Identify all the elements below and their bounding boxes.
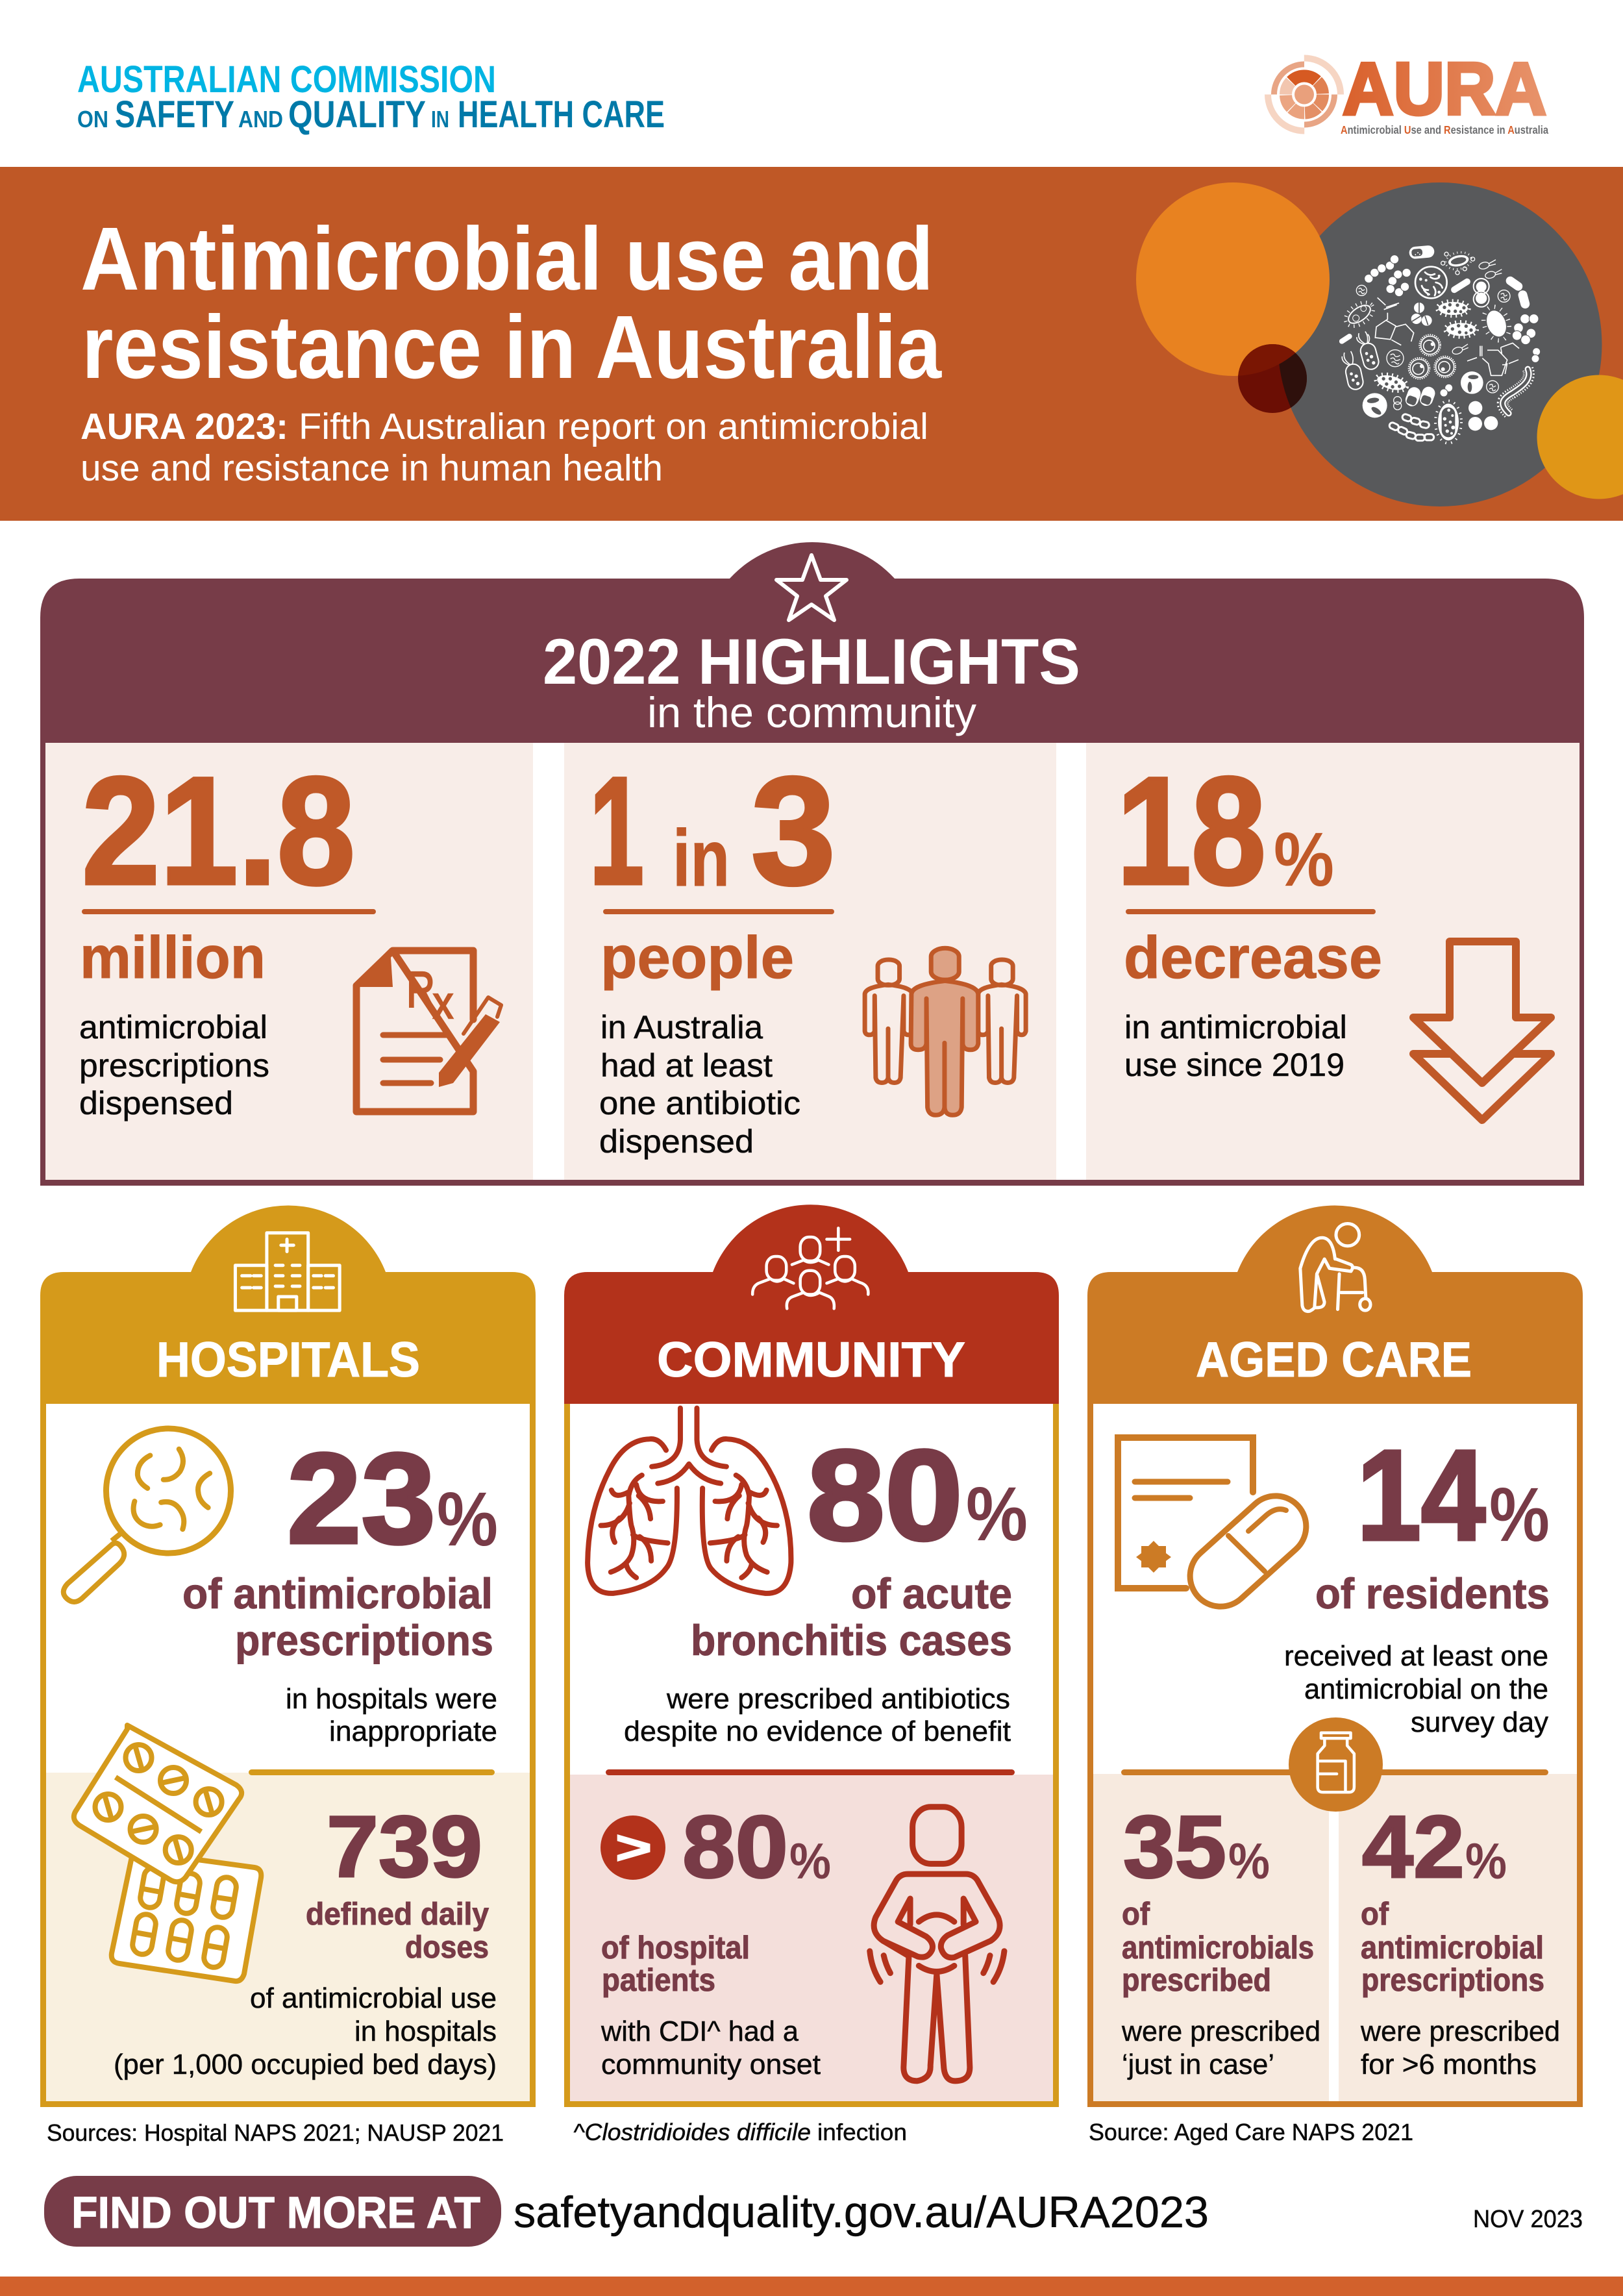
stat: 42 percent: % [1465,1832,1507,1890]
logo: AURA [1268,48,1548,136]
stat: 739 defined daily doses: defined daily [306,1897,489,1932]
icon: hospital building [235,1233,340,1310]
stat: 42 percent [1360,1797,1560,2080]
card: 21.8 million: antimicrobial [79,1009,267,1045]
stat: greater than 80 percent: community onset [601,2049,821,2080]
stat: 14 percent: antimicrobial on the [1304,1673,1548,1705]
stat: greater than 80 percent [601,1797,831,2080]
footnote: CDI [573,2119,907,2145]
logo: Australian Commission on Safety and Quality in Health Care: HEALTH CARE [458,94,665,136]
icon: group of people with plus [752,1228,868,1308]
card: 18% decrease [1086,743,1580,1180]
stat: 42 percent: were prescribed [1360,2015,1560,2047]
stat: 14 percent: of residents [1315,1569,1550,1617]
heading: hospitals: HOSPITALS [156,1332,420,1388]
stat: 42 percent: for >6 months [1361,2049,1537,2080]
footnote: CDI: infection [817,2119,907,2145]
subtitle: use and resistance in human health [81,447,663,489]
stat: 35 percent: % [1228,1832,1270,1890]
stat: 35 percent: of [1122,1897,1150,1932]
stat: greater than 80 percent: of hospital [601,1930,750,1965]
stat: 35 percent: antimicrobials [1122,1930,1314,1965]
stat: 80 percent: bronchitis cases [691,1616,1012,1664]
subtitle: AURA 2023: [81,406,288,447]
stat: 14 percent: % [1489,1472,1550,1558]
card: 1 in 3 people: in [673,814,730,903]
card: 1 in 3 people: people [601,925,794,991]
stat: greater than 80 percent: patients [602,1963,715,1998]
stat: 739 defined daily doses: of antimicrobial use [250,1982,497,2014]
button: find out more: FIND OUT MORE AT [71,2188,480,2238]
stat: 739 defined daily doses: (per 1,000 occupied bed days) [114,2049,497,2080]
subtitle [81,406,928,489]
logo: Australian Commission on Safety and Quality in Health Care: ON [77,106,108,132]
logo: Australian Commission on Safety and Quality in Health Care: SAFETY [115,94,234,136]
card: 18% decrease: in antimicrobial [1124,1009,1347,1045]
stat: greater than 80 percent: > [615,1822,652,1874]
title: resistance in Australia [82,297,942,397]
footer band [0,2277,1623,2296]
logo: Australian Commission on Safety and Quality in Health Care: AUSTRALIAN COMMISSION [77,58,496,101]
title [81,209,942,397]
stat: 35 percent: prescribed [1122,1963,1271,1998]
card: 21.8 million: prescriptions [79,1047,269,1084]
subheading: in the community: in the community [647,688,976,736]
stat: 739 defined daily doses: in hospitals [354,2015,497,2047]
stat: 23 percent: % [437,1477,498,1562]
heading: 2022 highlights: 2022 HIGHLIGHTS [543,625,1080,697]
panel: community [564,1204,1059,2107]
card: 18% decrease: % [1274,817,1334,903]
heading: aged care: AGED CARE [1196,1332,1472,1388]
stat: 739 defined daily doses [114,1799,497,2080]
card: 1 in 3 people: 3 [751,745,836,917]
stat: 42 percent: 42 [1362,1797,1465,1896]
stat: 23 percent: of antimicrobial [182,1569,493,1617]
stat: 23 percent [182,1427,498,1747]
stat: greater than 80 percent: 80 [682,1797,788,1896]
stat: 14 percent [1284,1423,1550,1738]
stat: 42 percent: prescriptions [1361,1963,1544,1998]
subtitle: Fifth Australian report on antimicrobial [299,406,928,447]
stat: 23 percent: prescriptions [235,1616,493,1664]
stat: 739 defined daily doses: doses [405,1930,489,1965]
card: 18% decrease: 18 [1117,745,1266,917]
card: 18% decrease: decrease [1124,925,1382,991]
stat: 35 percent: were prescribed [1121,2015,1320,2047]
publication date: NOV 2023 [1473,2206,1583,2233]
stat: 35 percent: 35 [1123,1797,1226,1896]
panel: title banner [0,167,1623,521]
stat: 14 percent: survey day [1411,1706,1548,1738]
source note: aged care: Source: Aged Care NAPS 2021 [1089,2119,1413,2145]
icon: prescription and pen [354,948,501,1112]
card: 1 in 3 people: in Australia [601,1009,763,1045]
stat: 35 percent [1121,1797,1320,2080]
decorative circles [1136,182,1623,506]
source note: hospitals: Sources: Hospital NAPS 2021; NAUSP 2021 [47,2119,504,2146]
icon: person with abdominal pain [870,1807,1004,2081]
icon: AURA emblem [1268,58,1341,131]
stat: 739 defined daily doses: 739 [327,1799,482,1895]
stat: greater than 80 percent: % [789,1832,831,1890]
stat: 23 percent: 23 [287,1427,436,1570]
stat: 23 percent: inappropriate [329,1716,497,1747]
card: 1 in 3 people: 1 [589,745,644,917]
icon: three people [865,948,1026,1115]
panel: aged care [1087,1205,1583,2107]
card: 18% decrease: use since 2019 [1124,1047,1344,1083]
icon: lungs [588,1408,791,1593]
icon: microbes and medicines cluster [1338,245,1541,443]
stat: 80 percent: of acute [851,1569,1012,1617]
logo: AURA: Antimicrobial Use and Resistance in Australia [1341,123,1548,136]
card: 21.8 million: dispensed [79,1085,233,1121]
stat: 80 percent: despite no evidence of benefit [624,1716,1011,1747]
link text: safetyandquality.gov.au/AURA2023 [514,2188,1209,2237]
stat: 80 percent [624,1423,1028,1747]
stat: 80 percent: % [966,1471,1028,1557]
stat: 35 percent: ‘just in case’ [1122,2049,1274,2080]
icon: prescription and pen: x [433,977,453,1028]
icon: magnifying glass with bacteria [64,1429,230,1602]
icon: blister packs [74,1725,261,1981]
card: 21.8 million: million [80,925,266,991]
icon: document and capsule [1118,1438,1319,1619]
card: 21.8 million [45,743,533,1180]
panel: 2022 highlights [40,542,1584,1186]
stat: 80 percent: 80 [807,1423,963,1567]
logo: Australian Commission on Safety and Quality in Health Care: QUALITY [288,94,426,136]
icon: older person with walker [1300,1223,1370,1312]
stat: 23 percent: in hospitals were [286,1683,497,1715]
card: 1 in 3 people [564,743,1056,1180]
title: Antimicrobial use and [81,209,934,309]
card: 1 in 3 people: dispensed [599,1123,754,1160]
icon: medicine bottle [1289,1717,1383,1812]
heading: community: COMMUNITY [657,1332,965,1388]
icon: prescription and pen: R [406,961,435,1018]
footnote: CDI: ^Clostridioides difficile [573,2119,811,2145]
logo: Australian Commission on Safety and Quality in Health Care [77,58,665,136]
stat: 42 percent: antimicrobial [1361,1930,1544,1965]
icon: down arrow [1413,942,1551,1120]
logo: Australian Commission on Safety and Quality in Health Care: AND [238,106,283,132]
card: 1 in 3 people: one antibiotic [599,1085,800,1121]
card: 1 in 3 people: had at least [601,1047,773,1084]
stat: greater than 80 percent: with CDI^ had a [601,2015,799,2047]
stat: 42 percent: of [1361,1897,1389,1932]
stat: 14 percent: 14 [1357,1423,1485,1567]
card: 21.8 million: 21.8 [82,745,355,917]
logo: AURA: AURA [1343,48,1546,131]
icon: star [776,555,847,620]
logo: Australian Commission on Safety and Quality in Health Care: IN [431,106,449,132]
panel: hospitals [40,1205,536,2107]
stat: 14 percent: received at least one [1284,1640,1548,1672]
button: find out more [44,2176,501,2247]
stat: 80 percent: were prescribed antibiotics [666,1683,1010,1715]
